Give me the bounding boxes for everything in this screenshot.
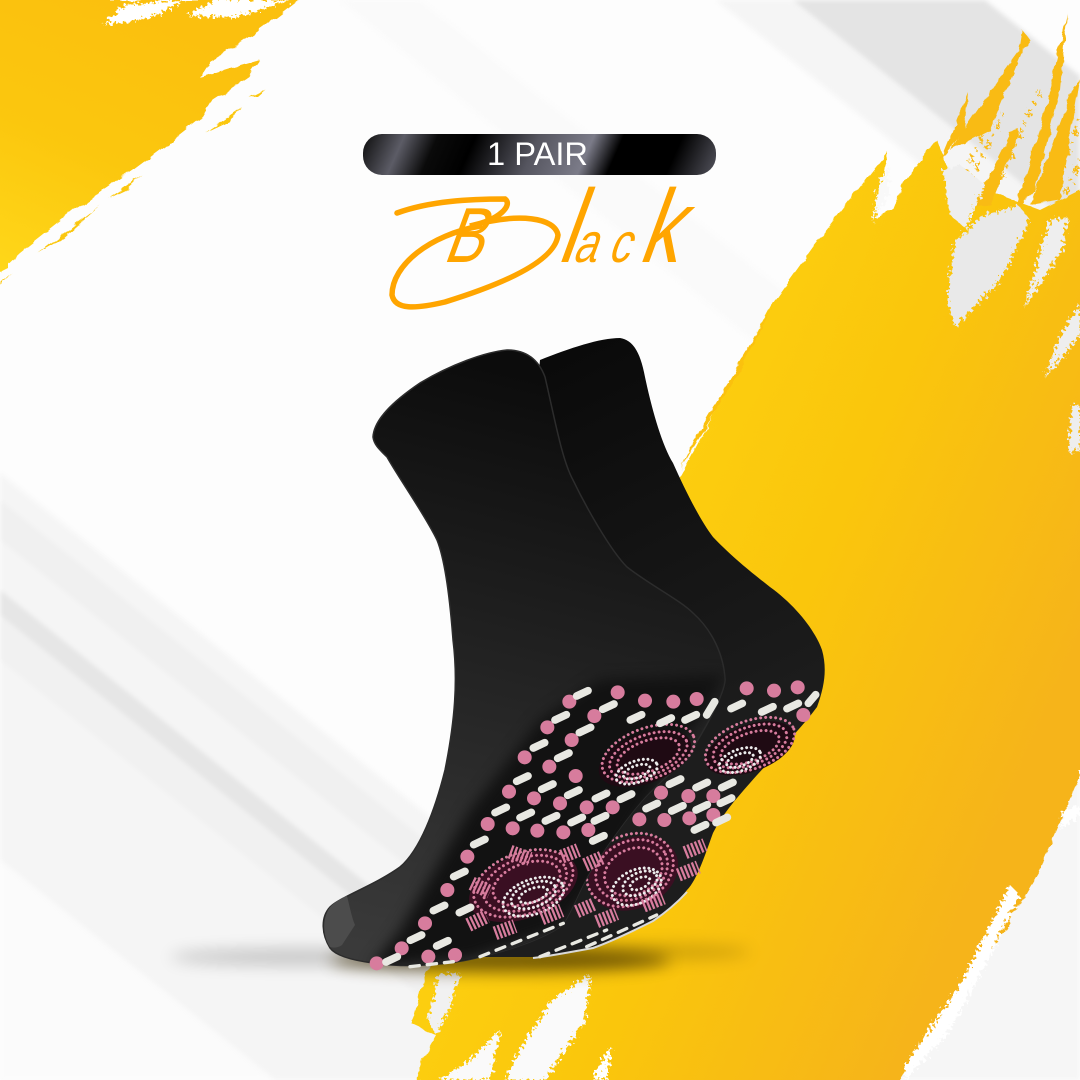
toe seam patch (324, 896, 355, 948)
heading text: k (629, 169, 710, 285)
yellow brush: right main stroke (412, 13, 1080, 1080)
speckled yellow streaks (950, 90, 1080, 300)
sock: front (323, 350, 725, 968)
ground shadow under socks (170, 944, 750, 972)
pill badge: 1 PAIR (363, 134, 716, 175)
heading text: a (567, 211, 614, 274)
front sole grip dots (377, 691, 715, 967)
white brush marks at top edge (103, 0, 290, 25)
back sole grip dots (540, 687, 816, 957)
badge label: 1 PAIR (487, 136, 588, 172)
heading text: c (603, 211, 647, 274)
back sole rim (533, 892, 687, 958)
sole dark area (370, 675, 725, 968)
heading text: l (548, 169, 607, 285)
sock: back (480, 338, 825, 958)
heading text: B (436, 192, 506, 279)
script heading: Black (392, 169, 710, 307)
brush gaps in the yellow stroke (428, 165, 1080, 1080)
yellow brush: top left (0, 0, 298, 285)
